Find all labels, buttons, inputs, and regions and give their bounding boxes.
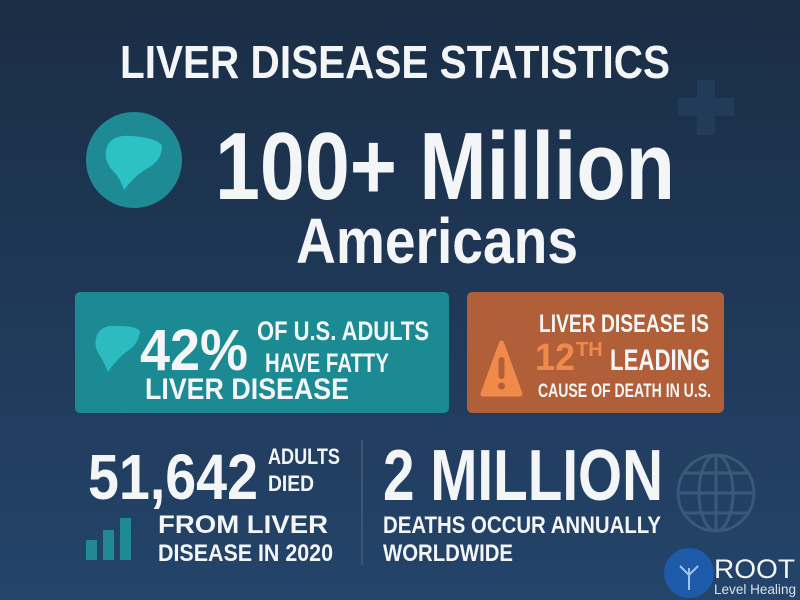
panel: fatty liver: LIVER DISEASE [145, 373, 349, 406]
icon: liver [96, 326, 140, 372]
panel: leading cause: LIVER DISEASE IS [539, 310, 709, 338]
panel: fatty liver [75, 292, 449, 413]
logo: Level Healing [714, 581, 796, 597]
stat 42%: 42% [140, 318, 248, 383]
stat: 51,642: FROM LIVER [158, 511, 328, 539]
icon: liver circle [86, 112, 182, 208]
text: OF U.S. ADULTS [257, 316, 429, 346]
panel: leading cause: TH [576, 339, 603, 361]
logo: ROOT [714, 554, 795, 584]
stat: 2 million: 2 MILLION [383, 436, 663, 516]
stat: 51,642: DISEASE IN 2020 [158, 540, 333, 567]
icon: plus [678, 80, 734, 135]
icon: warning [483, 343, 520, 394]
stat: 51,642: ADULTS [268, 444, 340, 469]
stat: 51,642 [86, 441, 340, 567]
title: LIVER DISEASE STATISTICS [120, 36, 670, 88]
stat: 51,642: 51,642 [88, 441, 258, 513]
logo [664, 548, 796, 598]
stat: 2 million: DEATHS OCCUR ANNUALLY [383, 512, 661, 539]
icon: bar chart [86, 518, 131, 560]
panel: leading cause [467, 292, 724, 413]
headline number: 100+ Million [215, 113, 675, 220]
stat: 2 million [383, 436, 663, 567]
stat: 2 million: WORLDWIDE [383, 540, 513, 567]
panel: leading cause: 12 [535, 337, 575, 379]
panel: fatty liver: HAVE FATTY [265, 348, 389, 378]
icon: globe [678, 455, 754, 531]
panel: leading cause: LEADING [610, 344, 710, 377]
headline subtitle: Americans [296, 205, 578, 277]
panel: leading cause: CAUSE OF DEATH IN U.S. [538, 381, 711, 402]
stat: 51,642: DIED [268, 471, 314, 496]
